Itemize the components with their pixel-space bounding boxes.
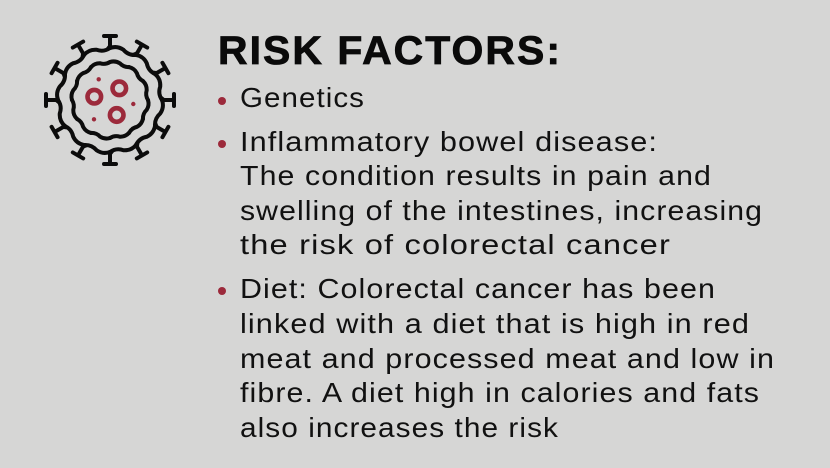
- bullet: diet: Diet: Colorectal cancer has been: [240, 273, 716, 304]
- title: RISK FACTORS:: [218, 29, 562, 73]
- bullet: diet: meat and processed meat and low in: [240, 343, 775, 374]
- bullet: inflammatory bowel disease: [218, 126, 763, 260]
- bullet: diet: fibre. A diet high in calories and fats: [240, 377, 760, 408]
- bullet: diet: linked with a diet that is high in red: [240, 308, 750, 339]
- bullet: inflammatory bowel disease: The condition results in pain and: [240, 160, 712, 191]
- bullet: diet: [218, 273, 775, 443]
- bullet: inflammatory bowel disease: swelling of the intestines, increasing: [240, 195, 763, 226]
- icon: virus cell: [42, 32, 178, 168]
- bullet: inflammatory bowel disease: the risk of colorectal cancer: [240, 229, 671, 260]
- bullet: inflammatory bowel disease: Inflammatory bowel disease:: [240, 126, 658, 157]
- bullet: diet: also increases the risk: [240, 412, 559, 443]
- bullet: genetics: Genetics: [240, 82, 365, 113]
